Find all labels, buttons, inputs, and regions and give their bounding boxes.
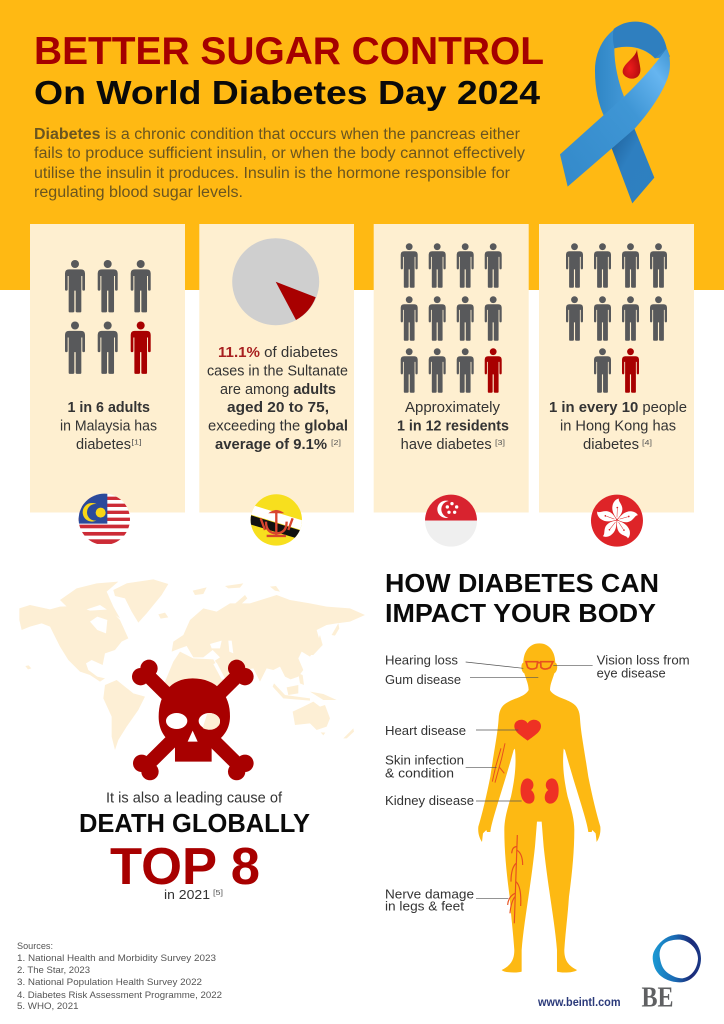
body labels: Heart disease [385,724,466,738]
sources: 5. WHO, 2021 [17,1001,78,1012]
icon: skull and crossbones [132,660,254,780]
stat text: Malaysia: diabetes [76,437,131,453]
icon: heart [514,720,541,741]
stat text: Hong Kong: diabetes [583,437,639,453]
stat text: Malaysia: in Malaysia has [60,419,157,435]
body labels: Nerve damage [385,887,474,901]
arm veins [492,743,505,783]
stat text: Malaysia: [1] [132,438,142,446]
sources: 1. National Health and Morbidity Survey 2023 [17,953,216,964]
sources: 3. National Population Health Survey 2022 [17,977,202,988]
icon: awareness ribbon with blood drop [560,22,670,203]
stat text: Singapore: Approximately [405,400,501,416]
stat text: Singapore [397,400,509,453]
stat text: Hong Kong [549,400,687,453]
website url: www.beintl.com [537,997,620,1009]
panel: Singapore [374,224,529,512]
stat text: Brunei: cases in the Sultanate [207,364,348,380]
body labels: Hearing loss [385,654,458,668]
title [34,30,544,111]
sources: 2. The Star, 2023 [17,965,90,976]
stat text: Brunei: are among adults [220,382,336,398]
body labels: Vision loss from [597,654,690,668]
stat text: Brunei: exceeding the global [208,419,348,435]
intro paragraph: regulating blood sugar levels. [34,184,243,201]
callout: death globally: [5] [213,888,223,897]
stat text: Hong Kong: [4] [642,438,652,447]
sources [17,941,222,1012]
stat text: Malaysia: 1 in 6 adults [68,400,150,416]
panel: Hong Kong [539,224,694,512]
header background [0,0,724,290]
callout: death globally [79,790,310,902]
body labels: Gum disease [385,673,461,687]
icon: blood drop [623,49,640,79]
icon: kidneys [521,778,559,804]
panel: Brunei [199,224,354,512]
intro paragraph: fails to produce sufficient insulin, or when the body cannot effectively [34,145,525,162]
stat text: Brunei: aged 20 to 75, [227,400,329,416]
stat text: Brunei: [2] [331,438,341,447]
logo: BE ring: BE [642,982,674,1014]
heading: how diabetes can impact your body [385,568,659,628]
leader lines [466,662,593,898]
callout: death globally: DEATH GLOBALLY [79,808,310,838]
stat text: Singapore: [3] [495,438,505,447]
people pictogram: 1 in 10 [566,243,667,393]
stat text: Brunei: average of 9.1% [215,437,327,453]
body labels: Skin infection [385,753,464,767]
sources: Sources: [17,941,53,952]
pie chart: 11.1% [232,238,319,325]
stat text: Hong Kong: in Hong Kong has [560,419,676,435]
body labels: eye disease [597,667,666,681]
sources: 4. Diabetes Risk Assessment Programme, 2022 [17,990,222,1001]
icon: glasses [526,662,553,669]
leg nerves [508,835,523,923]
title: On World Diabetes Day 2024 [34,74,541,111]
stat text: Brunei [207,345,348,453]
body labels: & condition [385,766,454,780]
body labels: in legs & feet [385,900,465,914]
body silhouette [478,643,600,973]
body diagram [466,643,600,973]
icon: Hong Kong flag [591,495,643,547]
heading: how diabetes can impact your body: HOW DIABETES CAN [385,568,659,598]
icon: Singapore flag [425,495,477,547]
stat text: Brunei: 11.1% of diabetes [218,345,338,361]
panel: Malaysia [30,224,185,512]
icon: Malaysia flag [78,494,130,544]
intro paragraph [34,126,525,201]
stat text: Hong Kong: 1 in every 10 people [549,400,687,416]
callout: death globally: It is also a leading cause of [106,790,283,807]
seas [210,641,233,679]
heading: how diabetes can impact your body: IMPACT YOUR BODY [385,598,656,628]
intro paragraph: utilise the insulin it produces. Insulin is the hormone responsible for [34,165,510,182]
callout: death globally: in 2021 [164,887,210,902]
title: BETTER SUGAR CONTROL [34,30,544,73]
body labels [385,654,690,914]
callout: death globally: TOP 8 [110,838,260,896]
people pictogram: 1 in 6 [65,260,151,374]
world map [19,579,365,750]
people pictogram: 1 in 12 [401,243,502,393]
stat text: Singapore: 1 in 12 residents [397,419,509,435]
stat text: Malaysia [60,400,157,453]
logo: BE ring [642,934,701,1014]
icon: Brunei flag [250,494,302,546]
stat text: Singapore: have diabetes [401,437,492,453]
intro paragraph: Diabetes is a chronic condition that occurs when the pancreas either [34,126,520,143]
body labels: Kidney disease [385,794,474,808]
